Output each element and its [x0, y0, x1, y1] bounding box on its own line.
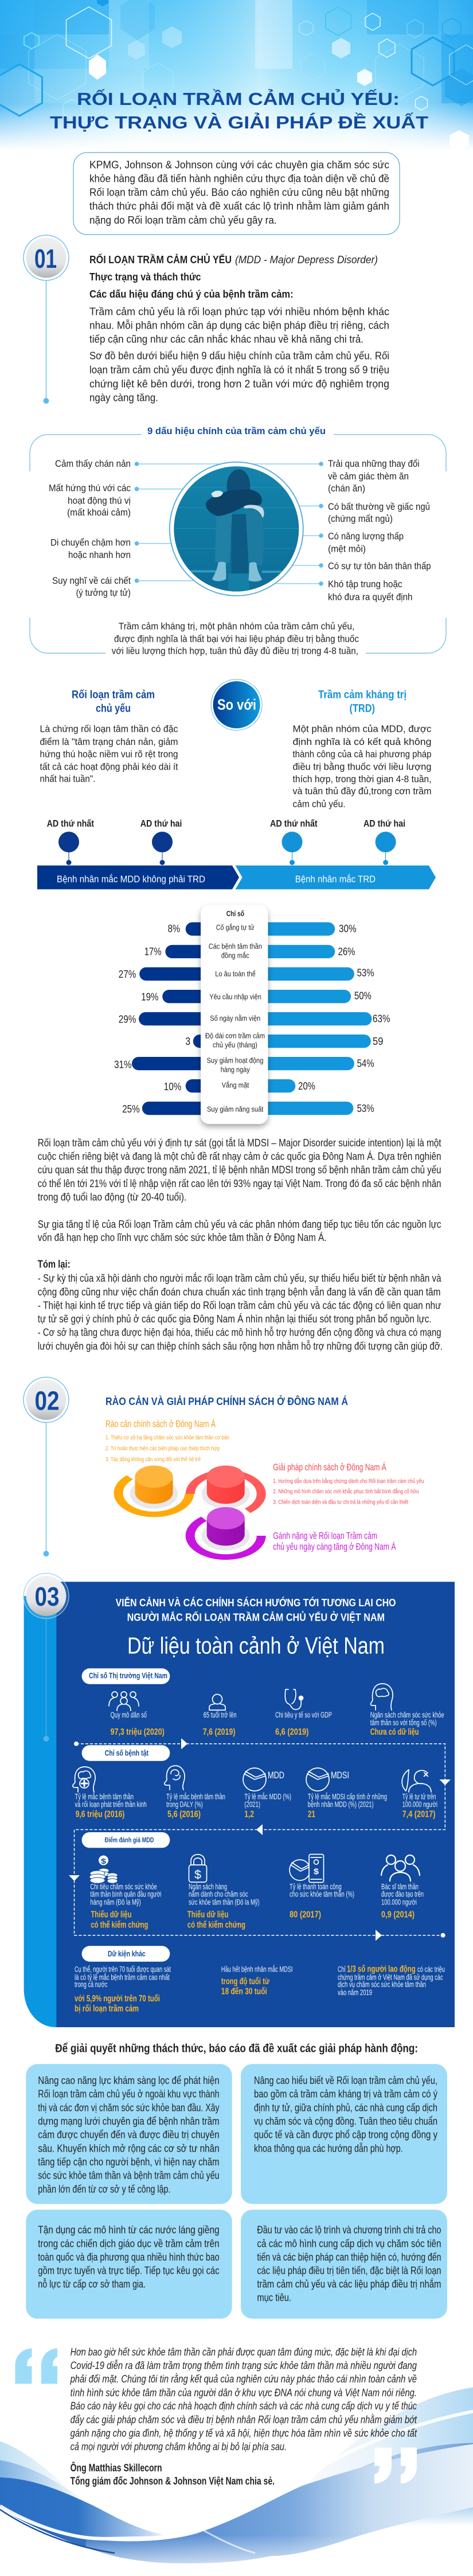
icon: population — [109, 1692, 139, 1711]
left sign labels: Di chuyển chậm hơn — [50, 538, 131, 548]
panel: 9 signs — [30, 426, 446, 657]
wave: left top light — [0, 2441, 86, 2506]
fact: one third of workers: có các triệu — [417, 1965, 445, 1973]
column: TRD: thích hợp, trong thời gian 4-8 tuần, — [292, 774, 431, 784]
disease indicator values: 5,6 (2016) — [167, 1809, 201, 1819]
left sign labels: Mất hứng thú với các — [49, 483, 131, 494]
AD labels: AD thứ hai — [363, 818, 405, 829]
fact: MDSI age — [221, 1965, 292, 1996]
timeline: AD markers and patient arrows — [37, 818, 436, 889]
icon: MDD pie — [243, 1768, 284, 1791]
frame of 9 signs — [30, 435, 446, 653]
icon: stethoscope — [285, 1689, 303, 1709]
assessment values: Thiếu dữ liệu — [187, 1910, 228, 1919]
card: screening: sâu. Khuyến khích mở rộng các cơ sở tư nhân — [38, 2142, 220, 2154]
left values: 19% — [141, 991, 158, 1002]
left sign labels: (ý tưởng tự tử) — [76, 588, 131, 598]
quote attribution: Tổng giám đốc Johnson & Johnson Việt Nam chia sẻ. — [71, 2475, 275, 2487]
growing burden text — [273, 1531, 396, 1552]
left values: 25% — [122, 1103, 140, 1115]
right sign labels — [328, 459, 431, 603]
footer waves — [0, 2387, 473, 2566]
right values: 26% — [338, 946, 355, 958]
market indicator labels: tâm thần so với tổng số (%) — [370, 1718, 437, 1727]
card: awareness: vụ chăm sóc và cộng đồng. Tuân theo tiêu chuẩn — [254, 2116, 437, 2127]
right values: 30% — [339, 923, 357, 935]
market indicator values: 7,6 (2019) — [203, 1727, 235, 1737]
icon: brain head — [371, 1684, 393, 1710]
pill: other facts — [82, 1946, 170, 1962]
wave: white ribbon — [0, 2411, 473, 2539]
connector lines — [136, 464, 321, 584]
arrow: TRD patients — [235, 865, 436, 889]
right bars — [261, 922, 372, 1115]
column: TRD: Một phân nhóm của MDD, được — [292, 724, 431, 735]
caption of 9 signs: Trầm cảm kháng trị, một phân nhóm của trầm cảm chủ yếu, — [119, 622, 354, 632]
index card: đồng mắc — [221, 951, 249, 960]
left sign labels — [49, 459, 131, 598]
card: investment: cả các mô hình cung cấp dịch vụ chăm sóc tiên — [257, 2238, 441, 2249]
wave: bottom fade — [86, 2535, 401, 2566]
icon: coins: $ — [101, 1857, 107, 1865]
section 01 text block: Sơ đồ bên dưới biểu hiện 9 dấu hiệu chính của trầm cảm chủ yếu. Rối — [89, 350, 389, 362]
fact: over 70 — [75, 1965, 171, 2014]
disease indicator values: 21 — [308, 1809, 315, 1819]
section 03 badge: 03 — [34, 1582, 60, 1611]
section 03 heading: VIỄN CẢNH VÀ CÁC CHÍNH SÁCH HƯỚNG TỚI TƯƠNG LAI CHO — [116, 1597, 396, 1609]
AD markers — [58, 832, 396, 865]
title — [50, 88, 428, 132]
column: MDD: nhất hai tuần". — [40, 774, 95, 784]
column: MDD: Là chứng rối loạn tâm thần có đặc — [40, 724, 178, 735]
policy solutions: Giải pháp chính sách ở Đông Nam Á — [273, 1462, 386, 1473]
market indicator labels: 65 tuổi trở lên — [204, 1711, 237, 1719]
text block: MDSI and summary: Tóm lại: — [38, 1259, 71, 1270]
disease indicator labels: (2021) — [244, 1800, 260, 1809]
right sign labels: Có sự tự tôn bản thân thấp — [328, 561, 431, 572]
assessment labels: sức khỏe tâm thần (Đô la Mỹ) — [189, 1898, 260, 1907]
fact: over 70: là có tỷ lệ mắc bệnh trầm cảm cao nhất — [75, 1973, 170, 1981]
fact: MDSI age: Hầu hết bệnh nhân mắc MDSI — [221, 1965, 292, 1973]
index card: Chỉ số — [226, 910, 244, 918]
left values — [114, 923, 190, 1115]
assessment values: có thể kiểm chứng — [187, 1920, 245, 1930]
fact: one third of workers: 1/3 số người lao động — [347, 1964, 416, 1974]
assessment labels: cho sức khỏe tâm thần (%) — [290, 1890, 354, 1899]
policy solutions: 2. Những mô hình chăm sóc mới khắc phục tính bất bình đẳng cố hữu — [273, 1488, 419, 1495]
left sign labels: hoặc nhanh hơn — [68, 550, 131, 560]
card: education campaigns: trong các chiến dịch giáo dục về trầm cảm trên — [38, 2238, 220, 2249]
title: RỐI LOẠN TRẦM CẢM CHỦ YẾU: — [77, 88, 400, 109]
panel: intro box: khỏe hàng đầu đã tiến hành nghiên cứu thực địa toàn diện về chủ đề — [89, 173, 389, 185]
assessment labels: năm dành cho chăm sóc — [189, 1890, 248, 1899]
section 01 text block: (MDD - Major Depress Disorder) — [235, 253, 378, 266]
disease indicator labels: Tỷ lệ mắc bệnh tâm thần — [166, 1793, 225, 1801]
disease indicator labels: 100.000 người — [402, 1800, 437, 1809]
connector dots — [135, 462, 323, 586]
wave: left dark — [0, 2477, 172, 2537]
right sign labels: Có năng lượng thấp — [328, 532, 404, 542]
text block: MDSI and summary: vốn đã hạn hẹp cho lĩnh vực chăm sóc sức khỏe tâm thần ở Đông Nam Á. — [38, 1232, 327, 1243]
pill: MDD assessment — [82, 1832, 170, 1848]
icon: MDSI pie: MDSI — [331, 1770, 349, 1781]
icon: lock: $ — [194, 1868, 201, 1882]
fact: over 70: với 5,9% người trên 70 tuổi — [75, 1993, 160, 2004]
column: MDD — [40, 689, 178, 784]
policy barriers — [105, 1418, 229, 1463]
fact: one third of workers — [338, 1964, 445, 1997]
right sign labels: về cảm giác thèm ăn — [328, 471, 409, 482]
section 01 text block: RỐI LOẠN TRẦM CẢM CHỦ YẾU — [89, 253, 232, 266]
left sign labels: Cảm thấy chán nản — [55, 459, 131, 469]
wave: crossing light ribbon — [183, 2519, 255, 2553]
column: MDD: hứng thú hoặc niềm vui rõ rệt trong — [40, 750, 178, 760]
icon: MDSI pie — [306, 1768, 349, 1791]
left sign labels: (mất khoái cảm) — [67, 508, 131, 518]
left sign labels: Suy nghĩ về cái chết — [52, 576, 131, 586]
assessment values: có thể kiểm chứng — [91, 1920, 148, 1930]
right values: 59 — [373, 1036, 383, 1047]
index card: Số ngày nằm viện — [210, 1014, 260, 1022]
market indicator labels: Quy mô dân số — [111, 1711, 147, 1719]
right values — [298, 923, 390, 1114]
disease indicator labels: Tỷ lệ mắc MDD (%) — [244, 1793, 291, 1801]
fact: over 70: trong cả nước — [75, 1980, 108, 1989]
cylinder: barriers — [119, 1466, 189, 1515]
photo: person hugging knees — [170, 462, 303, 596]
section 03 heading — [116, 1597, 396, 1658]
panel: intro box: nặng do Rối loạn trầm cảm chủ yếu gây ra. — [89, 214, 277, 226]
panel: intro box — [73, 153, 400, 235]
policy barriers: 3. Tác động không cân xứng đối với thế hệ trẻ — [105, 1456, 201, 1463]
card: screening: cảm được chuyển đến và được điều trị chuyên — [38, 2129, 220, 2141]
index card: Cố gắng tự tử — [216, 923, 255, 932]
left values: 27% — [119, 969, 136, 980]
icon: coins — [89, 1856, 118, 1883]
card: education campaigns: nỗ lực từ cấp cơ sở tham gia. — [38, 2278, 146, 2290]
card: education campaigns: gồm trực tuyến và trực tiếp. Tiếp tục kêu gọi các — [38, 2265, 220, 2276]
card: screening: thị và các đơn vị chăm sóc sức khỏe ban đầu. Xây — [38, 2102, 220, 2113]
card: screening: dựng mạng lưới chuyên gia để bệnh nhân trầm — [38, 2116, 220, 2127]
card: investment: mục tiêu. — [257, 2292, 291, 2304]
assessment labels: Tỷ lệ thanh toán công — [290, 1882, 342, 1891]
index card: hàng ngày — [221, 1065, 250, 1074]
caption of 9 signs: được định nghĩa là thất bại với hai liệu pháp điều trị bằng thuốc — [114, 633, 359, 644]
panel: intro box: thách thức phải đối mặt và đề xuất các lộ trình nhằm làm giảm gánh — [89, 200, 389, 212]
fact: over 70: bị rối loạn trầm cảm — [75, 2004, 139, 2014]
wave: lower right band — [310, 2485, 473, 2546]
assessment labels: tâm thần bình quân đầu người — [90, 1890, 162, 1899]
right values: 53% — [357, 967, 374, 979]
section 01 text block: loạn trầm cảm chủ yếu được định nghĩa là có ít nhất 5 trong số 9 triệu — [89, 364, 389, 376]
right values: 63% — [373, 1013, 390, 1025]
panel: intro box: Rối loạn trầm cảm chủ yếu. Báo cáo nghiên cứu cũng nêu bật những — [89, 186, 389, 198]
fact: MDSI age: 18 đến 30 tuổi — [221, 1986, 267, 1996]
section 01 text block: Các dấu hiệu đáng chú ý của bệnh trầm cảm: — [89, 288, 294, 300]
wave: navy edge — [0, 2509, 115, 2553]
AD labels: AD thứ nhất — [270, 818, 318, 829]
AD labels: AD thứ nhất — [47, 818, 94, 829]
column: MDD: điểm là "tâm trạng chán nản, giảm — [40, 737, 178, 747]
icon: brain swirl head — [165, 1766, 185, 1790]
policy solutions: 3. Chiến dịch toàn diện và đầu tư chi trả là những yếu tố cần thiết — [273, 1499, 408, 1506]
section 03 badge — [24, 1574, 69, 1618]
fact: one third of workers: Chỉ — [338, 1965, 346, 1973]
right sign labels: Khó tập trung hoặc — [328, 579, 402, 590]
group: MDD assessment — [82, 1832, 424, 1930]
market indicator values: 97,3 triệu (2020) — [111, 1727, 165, 1737]
right sign labels: Có bất thường về giấc ngủ — [328, 502, 430, 512]
disease indicator labels: và rối loạn phát triển thần kinh — [75, 1800, 147, 1809]
assessment values: Thiếu dữ liệu — [91, 1910, 132, 1919]
section 01 badge — [24, 235, 69, 404]
panel: intro box: KPMG, Johnson & Johnson cùng với các chuyên gia chăm sóc sức — [89, 158, 389, 170]
column: TRD: (TRD) — [350, 703, 375, 715]
card: awareness: khoa thông qua các hướng dẫn phù hợp. — [254, 2142, 403, 2154]
quote section — [15, 2347, 417, 2487]
card: awareness: bao gồm cả trầm cảm kháng trị và trầm cảm có ý — [254, 2089, 437, 2100]
market indicator labels: Chi tiêu y tế so với GDP — [275, 1711, 332, 1719]
group: other facts — [75, 1946, 445, 2014]
card: investment: trầm cảm chủ yếu và các liệu pháp điều trị nhắm — [257, 2278, 441, 2290]
quote text: cả mọi người với phương châm không ai bị bỏ lại phía sau. — [71, 2441, 287, 2453]
section 02 heading: RÀO CẢN VÀ GIẢI PHÁP CHÍNH SÁCH Ở ĐÔNG NAM Á — [105, 1395, 348, 1407]
fact: one third of workers: vào năm 2019 — [338, 1988, 372, 1997]
disease indicator values: 9,6 triệu (2016) — [76, 1809, 124, 1819]
icon: suicide rate person — [402, 1769, 431, 1792]
left values: 31% — [114, 1059, 132, 1071]
icon: opening quote — [15, 2348, 57, 2384]
section 01 text block: nhau. Mỗi phân nhóm cần áp dụng các biện pháp điều trị riêng, cách — [89, 319, 389, 331]
AD labels — [47, 818, 405, 829]
card: screening: sóc sức khỏe tâm thần và bệnh trầm cảm chủ yếu — [38, 2170, 220, 2181]
card: awareness — [241, 2064, 447, 2204]
column: TRD: thành công của cả hai phương pháp — [292, 750, 431, 760]
disease indicator labels: Tỷ lệ mắc bệnh tâm thần — [75, 1793, 134, 1801]
disease indicator labels: trong DALY (%) — [166, 1800, 203, 1809]
flow path: dashed arrows — [69, 1738, 451, 1941]
policy solutions — [273, 1462, 424, 1506]
index card: chủ yếu (tháng) — [213, 1041, 257, 1049]
index card: Suy giảm hoạt động — [206, 1056, 263, 1064]
column: TRD: cảm chủ yếu. — [292, 799, 345, 809]
icon: lock — [189, 1855, 206, 1882]
growing burden text: chủ yếu ngày càng tăng ở Đông Nam Á — [273, 1541, 396, 1552]
left values: 3 — [185, 1036, 190, 1047]
disease indicator values — [76, 1809, 436, 1819]
column: TRD: Trầm cảm kháng trị — [318, 689, 406, 701]
index card — [201, 905, 268, 1124]
fact: one third of workers: dịch vụ chăm sóc sức khỏe tâm thần — [338, 1980, 426, 1989]
wave: lower right fade — [304, 2484, 473, 2549]
assessment values — [91, 1910, 415, 1930]
section 01 text block: Trầm cảm chủ yếu là rối loạn phức tạp với nhiều nhóm bệnh khác — [89, 305, 389, 317]
right values: 50% — [354, 990, 372, 1002]
pill: other facts: Dữ kiện khác — [108, 1949, 146, 1958]
right values: 53% — [357, 1103, 374, 1114]
wave: left middle — [0, 2460, 91, 2504]
wave: upper right mid band — [275, 2443, 473, 2529]
section 01 text block — [89, 253, 389, 403]
disease indicator labels: bệnh nhân MDD (%) (2021) — [308, 1800, 374, 1809]
caption of 9 signs — [112, 622, 359, 657]
assessment labels: được đào tạo trên — [381, 1890, 424, 1899]
card: investment — [241, 2210, 447, 2319]
right sign labels: (chứng mất ngủ) — [328, 514, 393, 524]
right sign labels: (mệt mỏi) — [328, 544, 366, 555]
index card: Độ dài cơn trầm cảm — [205, 1032, 265, 1040]
assessment labels: hàng năm (Đô la Mỹ) — [90, 1898, 141, 1907]
left values: 29% — [119, 1013, 136, 1025]
left values: 8% — [168, 923, 180, 935]
index card: Vắng mặt — [222, 1081, 249, 1090]
quote attribution: Ông Matthias Skillecorn — [71, 2461, 162, 2473]
comparison: MDD vs TRD — [40, 679, 431, 809]
assessment labels: Bác sĩ tâm thần — [381, 1882, 419, 1891]
icon: head with cross — [73, 1767, 95, 1792]
left sign labels: hoạt động thú vị — [68, 495, 131, 506]
quote attribution — [71, 2461, 275, 2487]
card: screening: Rối loạn trầm cảm chủ yếu ở ngoài khu vực thành — [38, 2089, 220, 2100]
text block: MDSI and summary: trong độ tuổi lao động (từ 20-40 tuổi). — [38, 1191, 186, 1203]
icon: pie and phone — [290, 1855, 323, 1882]
card: education campaigns — [26, 2210, 232, 2319]
arrow: TRD patients: Bệnh nhân mắc TRD — [295, 873, 376, 884]
caption of 9 signs: với liều lượng thích hợp, tuân thủ đầy đủ điều trị trong 4-8 tuần, — [112, 646, 358, 657]
market indicator values: Chưa có dữ liệu — [370, 1727, 419, 1737]
quote text — [70, 2347, 417, 2453]
icon: MDD pie: MDD — [268, 1770, 284, 1781]
card: screening: tăng tiếp cận cho người bệnh, vì hiện nay chăm — [38, 2156, 220, 2168]
card: awareness: quốc tế và cần được phổ cập trong cộng đồng y — [254, 2129, 437, 2141]
left values: 10% — [164, 1081, 181, 1092]
section 03 heading: Dữ liệu toàn cảnh ở Việt Nam — [127, 1632, 385, 1658]
diagram: linked cylinders — [119, 1466, 261, 1557]
left values: 17% — [144, 946, 162, 958]
policy barriers: 1. Thiếu cơ sở hạ tầng chăm sóc sức khỏe tâm thần cơ bản — [105, 1434, 229, 1441]
disease indicator values: 1,2 — [244, 1809, 254, 1819]
card: screening — [26, 2064, 232, 2204]
heading: action solutions: Để giải quyết những thách thức, báo cáo đã đề xuất các giải pháp hành động: — [55, 2042, 418, 2055]
column: MDD: Rối loạn trầm cảm — [72, 689, 155, 701]
index card: Lo âu toàn thể — [215, 970, 256, 978]
left bars — [132, 922, 210, 1115]
assessment labels: Chi tiêu chăm sóc sức khỏe — [90, 1882, 157, 1891]
header background with hexagons — [0, 0, 473, 151]
column: TRD: định nghĩa là có kết quả không — [292, 737, 431, 747]
panel: section 03 — [24, 1574, 455, 2027]
pill: market indicators: Chỉ số Thị trường Việt Nam — [89, 1672, 167, 1680]
icon: doctors — [381, 1855, 420, 1881]
section 02 badge: 02 — [34, 1385, 60, 1415]
market indicator values: 6,6 (2019) — [275, 1727, 308, 1737]
fact: over 70: Cụ thể, người trên 70 tuổi được quan sát — [75, 1965, 171, 1973]
cylinder: burden — [190, 1507, 261, 1557]
card: screening: phần lớn đến từ cơ sở y tế công lập. — [38, 2183, 170, 2195]
right values: 20% — [298, 1080, 315, 1092]
assessment labels: 100.000 người — [381, 1898, 417, 1907]
disease indicator labels: Tỷ lệ tự tử trên — [402, 1793, 436, 1801]
right sign labels: (chán ăn) — [328, 483, 365, 494]
group: disease indicators — [73, 1745, 437, 1819]
pill: market indicators — [82, 1668, 170, 1684]
arrow: MDD patients — [37, 865, 239, 889]
bar chart: MDD vs TRD — [114, 905, 390, 1124]
disease indicator values: 7,4 (2017) — [402, 1809, 436, 1819]
section 01 text block: ngày càng tăng. — [89, 391, 158, 403]
pill: MDD assessment: Điểm đánh giá MDD — [105, 1836, 154, 1844]
column: MDD: chủ yếu — [96, 703, 131, 715]
icon: pie and phone: $ — [314, 1867, 319, 1876]
icon: closing quote — [374, 2448, 417, 2484]
arrow: MDD patients: Bệnh nhân mắc MDD không phải TRD — [57, 873, 205, 884]
group: market indicators — [82, 1668, 444, 1737]
policy barriers: Rào cản chính sách ở Đông Nam Á — [105, 1418, 216, 1429]
title: THỰC TRẠNG VÀ GIẢI PHÁP ĐỀ XUẤT — [50, 112, 428, 132]
AD labels: AD thứ hai — [140, 818, 182, 829]
section 02 badge — [24, 1377, 69, 1556]
card: screening: Nâng cao năng lực khám sàng lọc để phát hiện — [38, 2075, 220, 2086]
section 01 badge: 01 — [34, 244, 57, 274]
right values: 54% — [357, 1058, 374, 1070]
cylinder: solutions — [190, 1466, 261, 1511]
icon: suicide rate person: x — [423, 1769, 429, 1778]
assessment labels: Ngân sách hàng — [189, 1882, 227, 1891]
heading: 9 signs: 9 dấu hiệu chính của trầm cảm chủ yếu — [147, 426, 326, 436]
column: TRD — [292, 689, 431, 809]
text block: MDSI and summary — [38, 1137, 443, 1352]
section 03 heading: NGƯỜI MẮC RỐI LOẠN TRẦM CẢM CHỦ YẾU Ở VIỆT NAM — [127, 1611, 385, 1623]
right sign labels: khó đưa ra quyết định — [328, 592, 413, 603]
wave: upper right light band — [269, 2387, 473, 2523]
right sign labels: Trải qua những thay đổi — [328, 459, 420, 469]
wave: main bottom band — [0, 2444, 473, 2563]
assessment values: 0,9 (2014) — [381, 1910, 415, 1919]
column: MDD: tất cả các hoạt động phải kéo dài ít — [40, 762, 178, 772]
badge: so với: So với — [217, 696, 256, 713]
policy solutions: 1. Hướng dẫn dựa trên bằng chứng dành cho Rối loạn trầm cảm chủ yếu — [273, 1477, 424, 1485]
index card: Các bệnh tâm thần — [209, 942, 262, 950]
growing burden text: Gánh nặng về Rối loạn Trầm cảm — [273, 1531, 377, 1541]
market indicator values — [111, 1727, 419, 1737]
section 01 text block: Thực trạng và thách thức — [89, 271, 201, 283]
section 01 text block: chứng liệt kê bên dưới, trong hơn 2 tuần với mức độ nghiêm trọng — [89, 378, 389, 390]
market indicator labels — [111, 1711, 444, 1727]
card: education campaigns: toàn quốc và địa phương qua nhiều hình thức bao — [38, 2251, 220, 2263]
icon: elderly person — [209, 1694, 225, 1710]
index card: Suy giảm năng suất — [207, 1105, 264, 1113]
index card: Yêu cầu nhập viện — [209, 993, 261, 1001]
column: TRD: điều trị bằng thuốc với liều lượng — [292, 761, 431, 772]
column: TRD: và tuân thủ đầy đủ,trong cơn trầm — [292, 786, 431, 797]
disease indicator labels — [75, 1793, 437, 1809]
pill: disease indicators — [82, 1745, 170, 1761]
badge: so với — [211, 679, 262, 731]
policy barriers: 2. Trì hoãn thực hiện các biện pháp can thiệp thích hợp — [105, 1445, 220, 1452]
card: education campaigns: Tận dụng các mô hình từ các nước láng giềng — [38, 2224, 220, 2235]
disease indicator labels: Tỷ lệ mắc MDSI cấp tính ở những — [308, 1793, 387, 1801]
pill: disease indicators: Chỉ số bệnh tật — [105, 1748, 148, 1758]
assessment labels — [90, 1882, 424, 1907]
section 01 text block: tiếp cận cũng như các cân nhắc khác nhau về khả năng chi trả. — [89, 333, 363, 345]
panel background — [24, 1582, 455, 2027]
fact: MDSI age: trong độ tuổi từ — [221, 1976, 269, 1986]
assessment values: 80 (2017) — [290, 1910, 321, 1919]
